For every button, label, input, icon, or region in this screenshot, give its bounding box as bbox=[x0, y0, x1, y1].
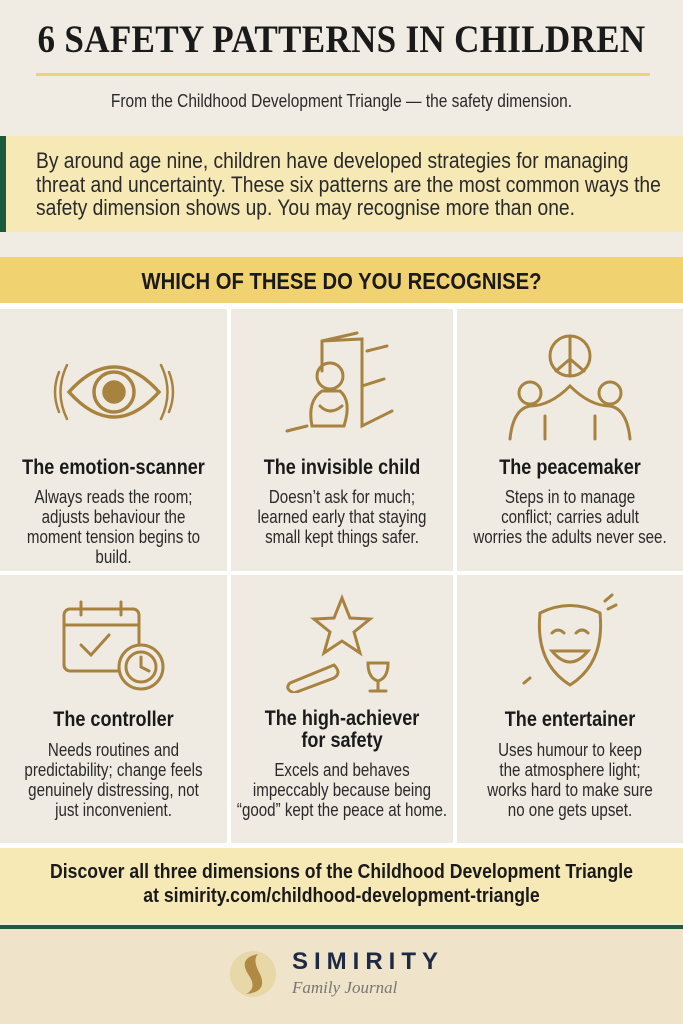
panel: high-achiever: Excels and behaves bbox=[274, 760, 410, 780]
panel: emotion-scanner: The emotion-scanner bbox=[22, 456, 205, 479]
panel: invisible child bbox=[231, 309, 453, 571]
panel: high-achiever bbox=[231, 575, 453, 843]
footer call to action bbox=[0, 848, 683, 924]
panel: invisible child: The invisible child bbox=[264, 456, 420, 479]
panel: controller: just inconvenient. bbox=[55, 800, 172, 820]
footer call to action: at simirity.com/childhood-development-triangle bbox=[143, 884, 540, 907]
intro text block: By around age nine, children have developed strategies for managing threat and uncertainty. These six patterns are the most common ways the safety dimension shows up. You may recognise more than one. bbox=[36, 148, 661, 220]
panel: entertainer: Uses humour to keep bbox=[498, 740, 642, 760]
icon: peace sign and people bbox=[508, 334, 632, 440]
icon: logo mark bbox=[230, 951, 276, 997]
panel: high-achiever: The high-achiever bbox=[265, 707, 419, 730]
panel: emotion-scanner: moment tension begins to bbox=[27, 527, 200, 547]
panel: peacemaker: worries the adults never see. bbox=[473, 527, 667, 547]
logo: Family Journal bbox=[292, 978, 397, 997]
panel: high-achiever: impeccably because being bbox=[253, 780, 431, 800]
panel: peacemaker: Steps in to manage bbox=[505, 487, 635, 507]
panel: controller: The controller bbox=[53, 708, 174, 731]
panel: entertainer: the atmosphere light; bbox=[499, 760, 641, 780]
banner heading bbox=[0, 257, 683, 303]
panel: peacemaker: The peacemaker bbox=[499, 456, 641, 479]
panel: entertainer: works hard to make sure bbox=[487, 780, 653, 800]
icon: child in corner bbox=[286, 332, 394, 432]
intro text block bbox=[0, 136, 683, 232]
panel: invisible child: small kept things safer. bbox=[265, 527, 419, 547]
icon: calendar and clock bbox=[62, 600, 164, 690]
panel: high-achiever: for safety bbox=[301, 729, 383, 752]
panel: controller: Needs routines and bbox=[48, 740, 179, 760]
icon: eye bbox=[54, 364, 174, 420]
panel: controller: genuinely distressing, not bbox=[28, 780, 199, 800]
panel: entertainer bbox=[457, 575, 683, 843]
panel grid bbox=[0, 303, 683, 848]
panel: controller bbox=[0, 575, 227, 843]
panel: invisible child: Doesn’t ask for much; bbox=[269, 487, 415, 507]
panel: emotion-scanner: Always reads the room; bbox=[35, 487, 192, 507]
panel: emotion-scanner: adjusts behaviour the bbox=[42, 507, 185, 527]
icon: star, diploma, trophy bbox=[286, 594, 390, 693]
panel: invisible child: learned early that staying bbox=[258, 507, 426, 527]
banner heading: WHICH OF THESE DO YOU RECOGNISE? bbox=[142, 268, 541, 294]
panel: peacemaker bbox=[457, 309, 683, 571]
logo: SIMIRITY bbox=[292, 948, 444, 975]
panel: emotion-scanner: build. bbox=[95, 547, 132, 567]
panel: entertainer: no one gets upset. bbox=[508, 800, 632, 820]
panel: emotion-scanner bbox=[0, 309, 227, 571]
icon: comedy mask bbox=[522, 593, 618, 687]
logo bbox=[230, 948, 444, 997]
panel: entertainer: The entertainer bbox=[505, 708, 635, 731]
subtitle: From the Childhood Development Triangle — the safety dimension. bbox=[111, 91, 572, 111]
title: 6 SAFETY PATTERNS IN CHILDREN bbox=[38, 18, 645, 61]
panel: controller: predictability; change feels bbox=[24, 760, 203, 780]
panel: high-achiever: “good” kept the peace at home. bbox=[237, 800, 447, 820]
panel: peacemaker: conflict; carries adult bbox=[501, 507, 639, 527]
footer call to action: Discover all three dimensions of the Childhood Development Triangle bbox=[50, 860, 633, 883]
